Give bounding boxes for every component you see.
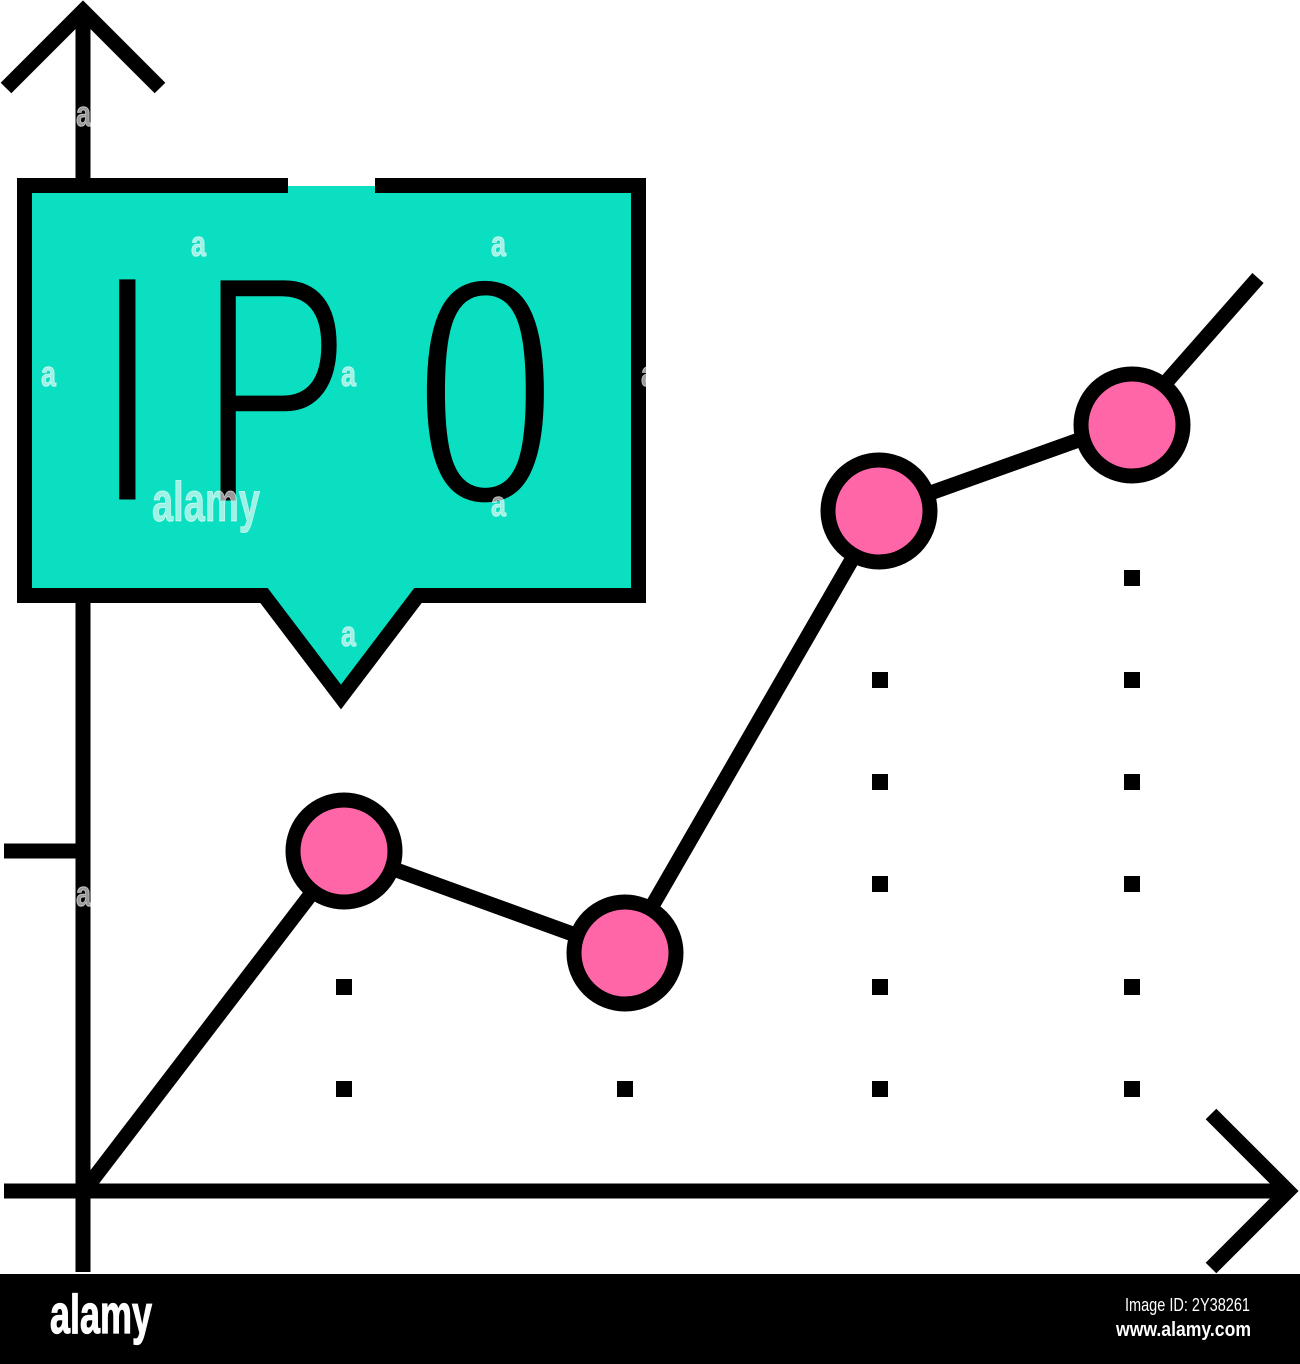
x axis with arrow bbox=[4, 1114, 1288, 1268]
watermark: a bbox=[191, 223, 207, 264]
watermark: a bbox=[76, 873, 92, 914]
dotted drop lines bbox=[336, 570, 1140, 1097]
watermark: a bbox=[491, 223, 507, 264]
watermark: alamy bbox=[152, 470, 260, 533]
line chart trend line bbox=[87, 278, 1258, 1187]
website: www.alamy.com bbox=[1115, 1319, 1251, 1341]
data points bbox=[293, 374, 1183, 1004]
footer bar bbox=[0, 1274, 1300, 1364]
watermark: a bbox=[76, 93, 92, 134]
watermark: a bbox=[641, 353, 657, 394]
watermark bbox=[41, 93, 657, 914]
watermark: a bbox=[41, 353, 57, 394]
y axis with arrow and tick bbox=[4, 8, 160, 1272]
image id: Image ID: 2Y38261 bbox=[1125, 1295, 1250, 1315]
IPO label: I bbox=[90, 202, 165, 577]
callout: IPO speech bubble bbox=[24, 186, 638, 697]
footer logo: alamy bbox=[50, 1283, 152, 1345]
watermark: a bbox=[341, 613, 357, 654]
IPO label: O bbox=[408, 219, 563, 576]
IPO label: P bbox=[199, 204, 352, 576]
watermark: a bbox=[341, 353, 357, 394]
watermark: a bbox=[491, 483, 507, 524]
IPO label bbox=[90, 202, 563, 577]
